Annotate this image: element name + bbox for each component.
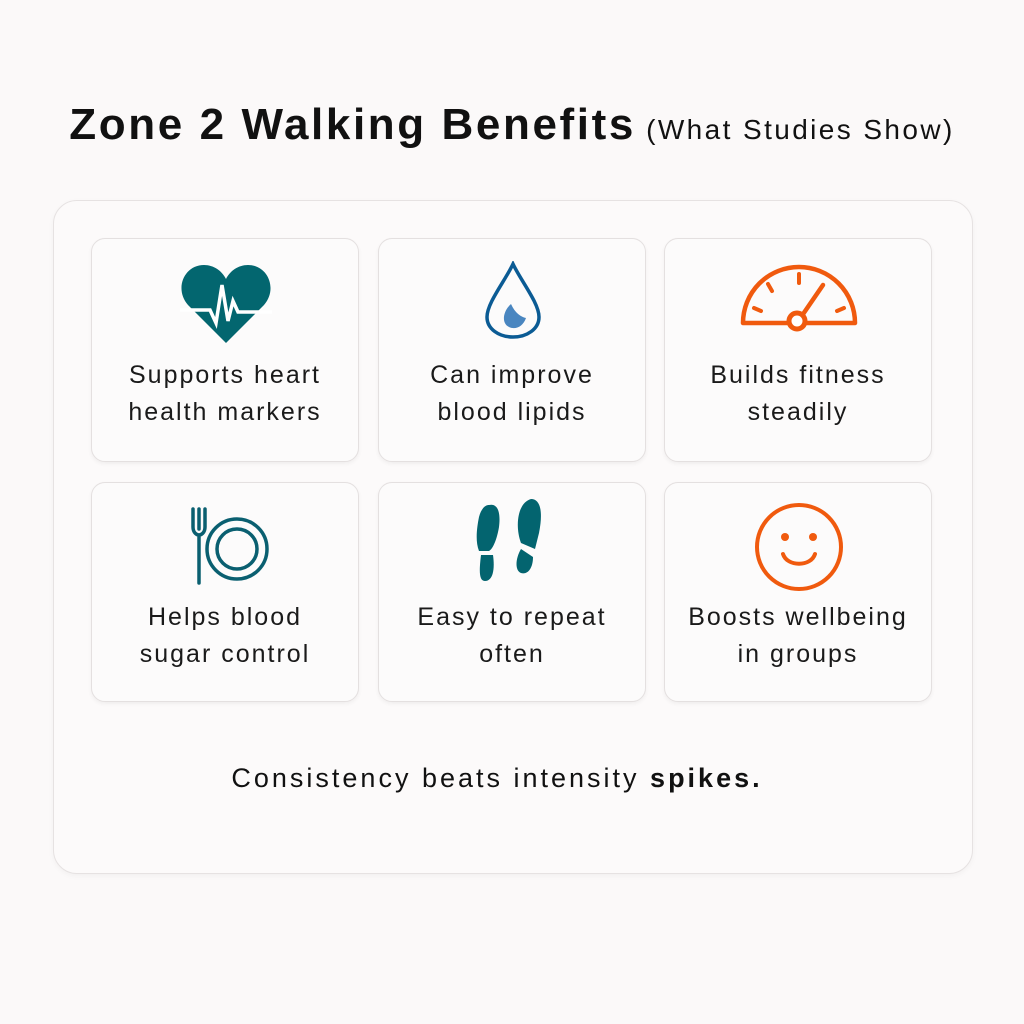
text <box>430 361 594 426</box>
footer message: Consistency beats intensity spikes. <box>231 763 763 793</box>
card: blood lipids <box>378 238 646 462</box>
text: health markers <box>128 398 322 426</box>
card: heart health <box>91 238 359 462</box>
card: blood sugar <box>91 482 359 702</box>
text <box>710 361 886 426</box>
text: Boosts wellbeing <box>688 603 908 631</box>
text: in groups <box>738 640 858 668</box>
panel: benefits <box>53 200 973 874</box>
text <box>417 603 607 668</box>
text: often <box>479 640 545 668</box>
text: Supports heart <box>129 361 321 389</box>
icon: footprints <box>476 499 541 581</box>
icon: fork and plate <box>191 507 269 585</box>
card: fitness <box>664 238 932 462</box>
text: Easy to repeat <box>417 603 607 631</box>
text: sugar control <box>140 640 310 668</box>
card: repeat <box>378 482 646 702</box>
text: Helps blood <box>148 603 302 631</box>
text <box>688 603 908 668</box>
text: steadily <box>748 398 848 426</box>
icon: smiley <box>755 503 843 591</box>
icon: gauge <box>740 264 858 332</box>
card: wellbeing <box>664 482 932 702</box>
text: blood lipids <box>437 398 587 426</box>
text: Can improve <box>430 361 594 389</box>
text <box>140 603 310 668</box>
title: Zone 2 Walking Benefits (What Studies Show) <box>69 100 955 149</box>
text: Builds fitness <box>710 361 886 389</box>
icon: heart <box>181 265 270 343</box>
text <box>128 361 322 426</box>
icon: drop <box>485 261 541 339</box>
